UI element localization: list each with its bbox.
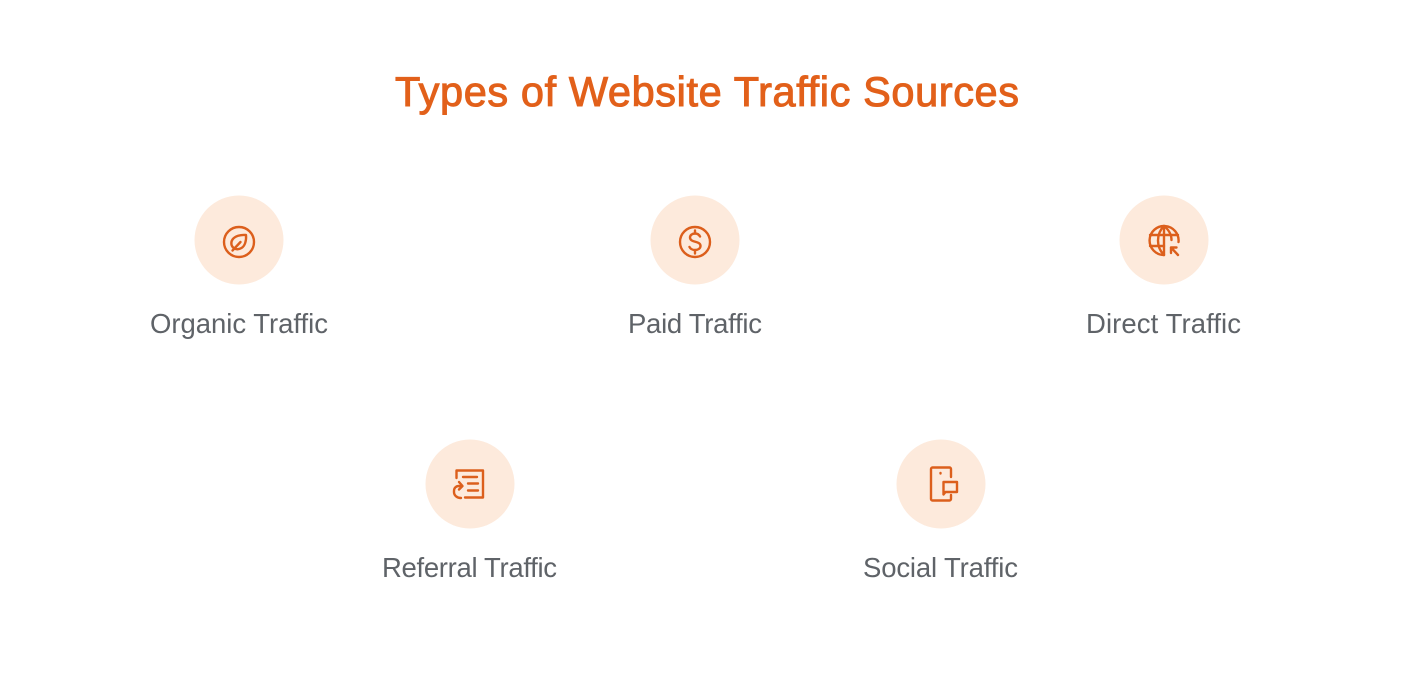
label: Direct Traffic: [1086, 308, 1241, 339]
icon: document with refresh arrow: [426, 440, 514, 528]
item: direct traffic: [1086, 196, 1241, 339]
icon: phone with chat bubble: [896, 440, 986, 528]
item: organic traffic: [150, 196, 328, 339]
label: Organic Traffic: [150, 308, 328, 339]
title: Types of Website Traffic Sources: [395, 68, 1019, 115]
item: referral traffic: [382, 440, 557, 583]
item: social traffic: [863, 440, 1018, 583]
label: Referral Traffic: [382, 552, 557, 583]
icon: globe with cursor: [1120, 196, 1208, 284]
icon: leaf in circle: [194, 196, 284, 284]
item: paid traffic: [628, 196, 762, 339]
label: Paid Traffic: [628, 308, 762, 339]
icon: dollar coin: [650, 196, 740, 284]
label: Social Traffic: [863, 552, 1018, 583]
